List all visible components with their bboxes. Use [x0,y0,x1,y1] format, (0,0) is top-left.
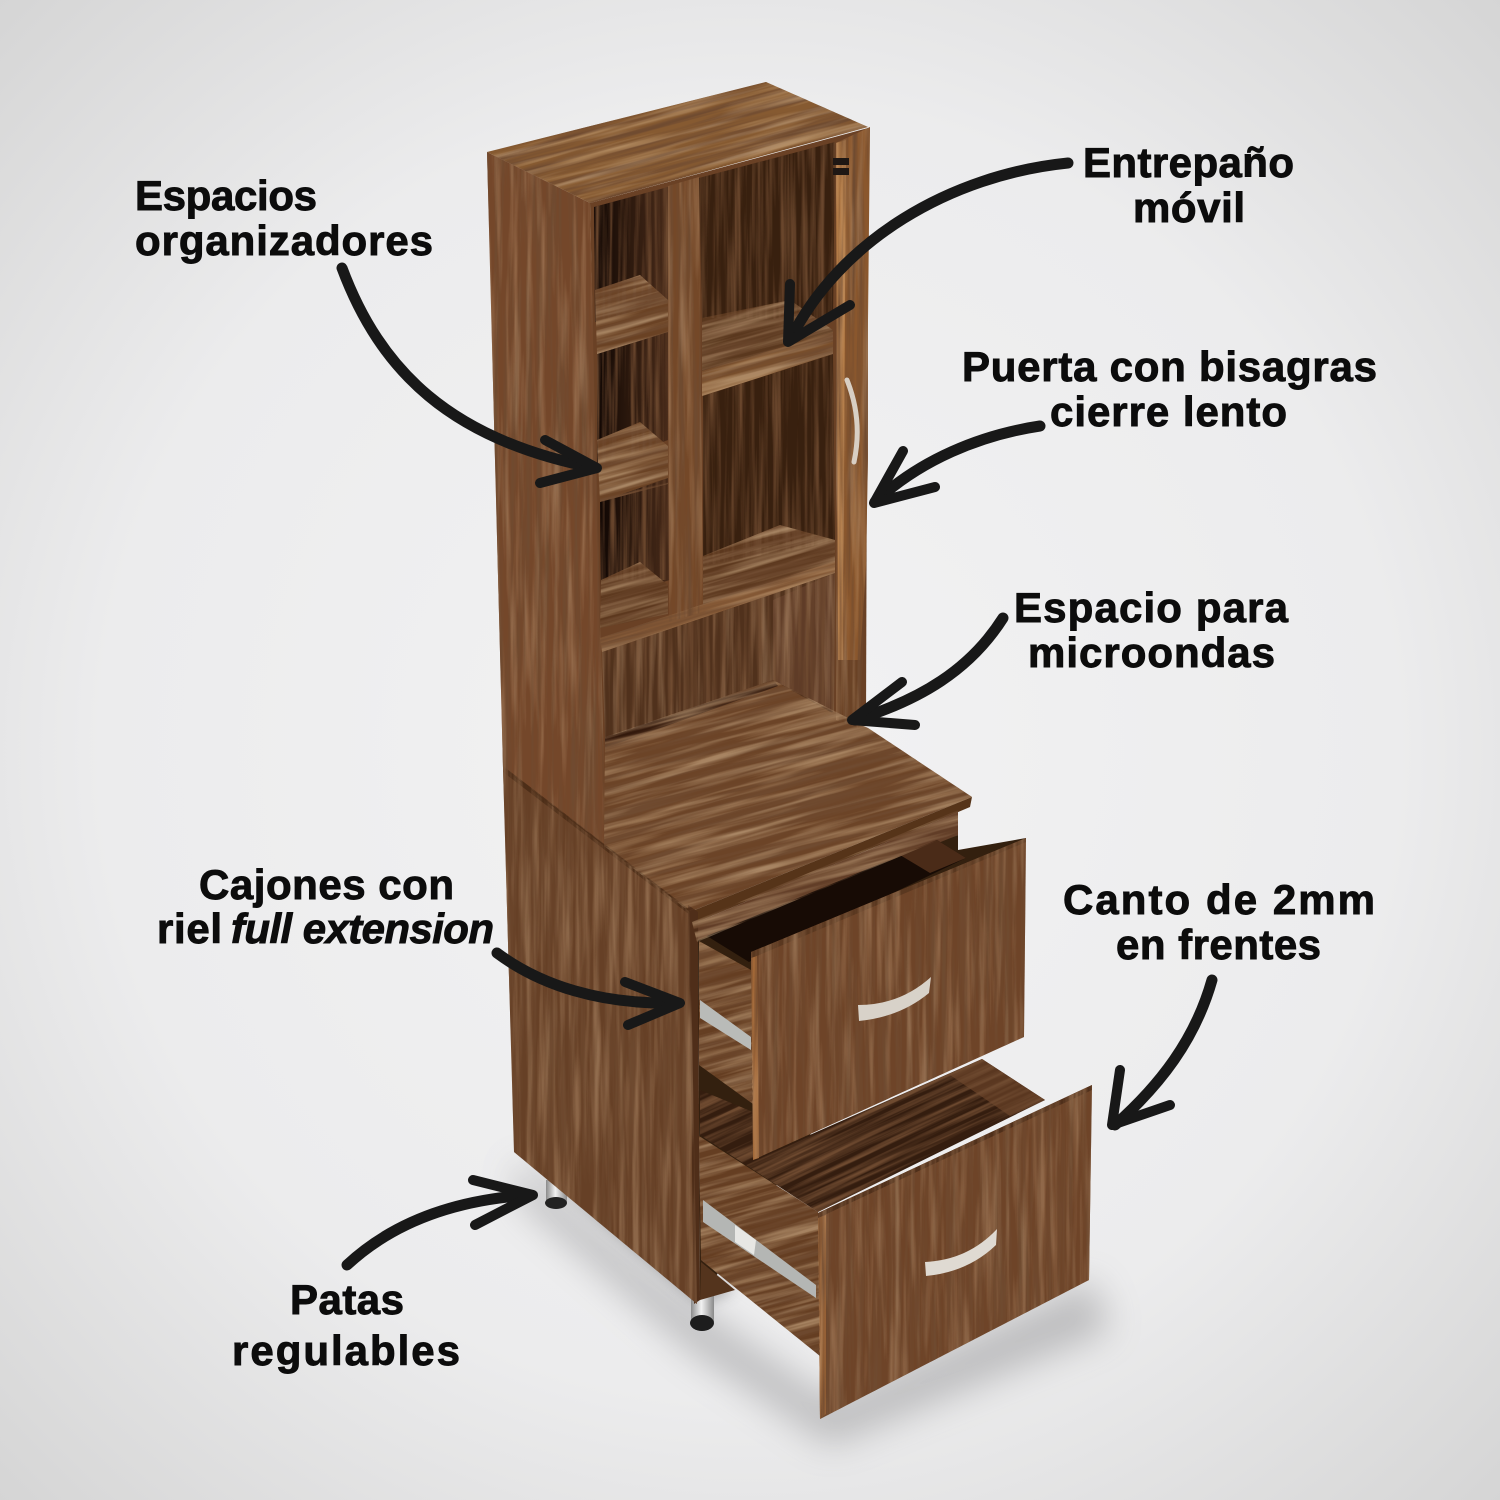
microwave back [602,573,835,738]
lower drawer front [818,1085,1092,1419]
interior frame [590,128,868,840]
leg right [690,1296,714,1331]
label: cajones con riel: riel [157,905,222,952]
shelf 1 [595,275,668,354]
upper drawer rail [700,1000,751,1050]
label: espacios organizadores [135,172,433,264]
upper drawer interior [707,840,966,962]
lower drawer rail [703,1200,816,1298]
door [836,127,870,660]
lower drawer handle [925,1229,997,1276]
hinge [833,158,849,175]
label: cajones con riel: full extension [231,905,494,952]
lower drawer interior [700,1059,1045,1212]
label: canto de 2mm [1063,876,1375,968]
small cell 3 [600,478,670,600]
arrow: cajones [497,953,680,1025]
arrow: canto [1112,980,1212,1125]
label: espacio para microondas: microondas [1028,629,1275,676]
tall cell [699,142,835,320]
vertical wood grain [480,80,1100,1425]
small cell 1 [594,187,668,322]
counter edge [690,797,972,924]
upper drawer side [699,941,753,1104]
upper side panel [487,152,606,846]
dark drawer grain [700,1059,1044,1212]
label: puerta con bisagras: cierre lento [1050,388,1287,435]
arrow: patas [347,1180,533,1265]
drawer opening [698,835,1026,1300]
lower drawer side [699,1136,820,1356]
furniture: kitchen cabinet [487,82,1092,1419]
label: puerta con bisagras [962,343,1377,435]
label: espacios organizadores: Espacios [135,172,317,219]
label: canto de 2mm: Canto de 2mm [1063,876,1375,923]
label: canto de 2mm: en frentes [1116,921,1321,968]
door handle [847,380,857,462]
label: puerta con bisagras: Puerta con bisagras [962,343,1377,390]
movable shelf [702,300,833,396]
lower front post [688,905,700,1304]
label: entrepano movil: Entrepaño [1083,139,1294,186]
upper drawer handle [858,977,931,1021]
arrow: puerta con bisagras [874,426,1040,503]
label: cajones con riel [157,861,494,952]
floor shadows [516,1150,1110,1445]
label: patas regulables [232,1276,460,1374]
label: cajones con riel: Cajones con [199,861,454,908]
label: espacio para microondas [1014,584,1289,676]
arrow: entrepano movil [788,163,1068,342]
label: entrepano movil: móvil [1133,184,1245,231]
lower side panel [503,768,697,1304]
center divider [668,177,703,622]
shelf 2 [597,422,668,502]
label: patas regulables: Patas [290,1276,404,1323]
post below door [836,660,862,728]
diagonal wood grain [492,82,972,1356]
lower tall cell [703,354,835,566]
cavity under drawers [700,1262,735,1300]
long shelf [600,561,835,652]
counter and microwave floor [604,680,972,912]
dark cell grain [594,142,835,580]
cabinet top panel [487,82,868,203]
label: espacio para microondas: Espacio para [1014,584,1289,631]
small cell 2 [597,332,668,468]
label: espacios organizadores: organizadores [135,217,433,264]
under counter band [693,812,958,945]
label: patas regulables: regulables [232,1327,460,1374]
upper drawer front [751,838,1026,1160]
arrow: espacios organizadores [342,268,597,483]
label: entrepano movil [1083,139,1294,231]
arrow: espacio para microondas [852,618,1003,725]
leg left [545,1180,567,1209]
